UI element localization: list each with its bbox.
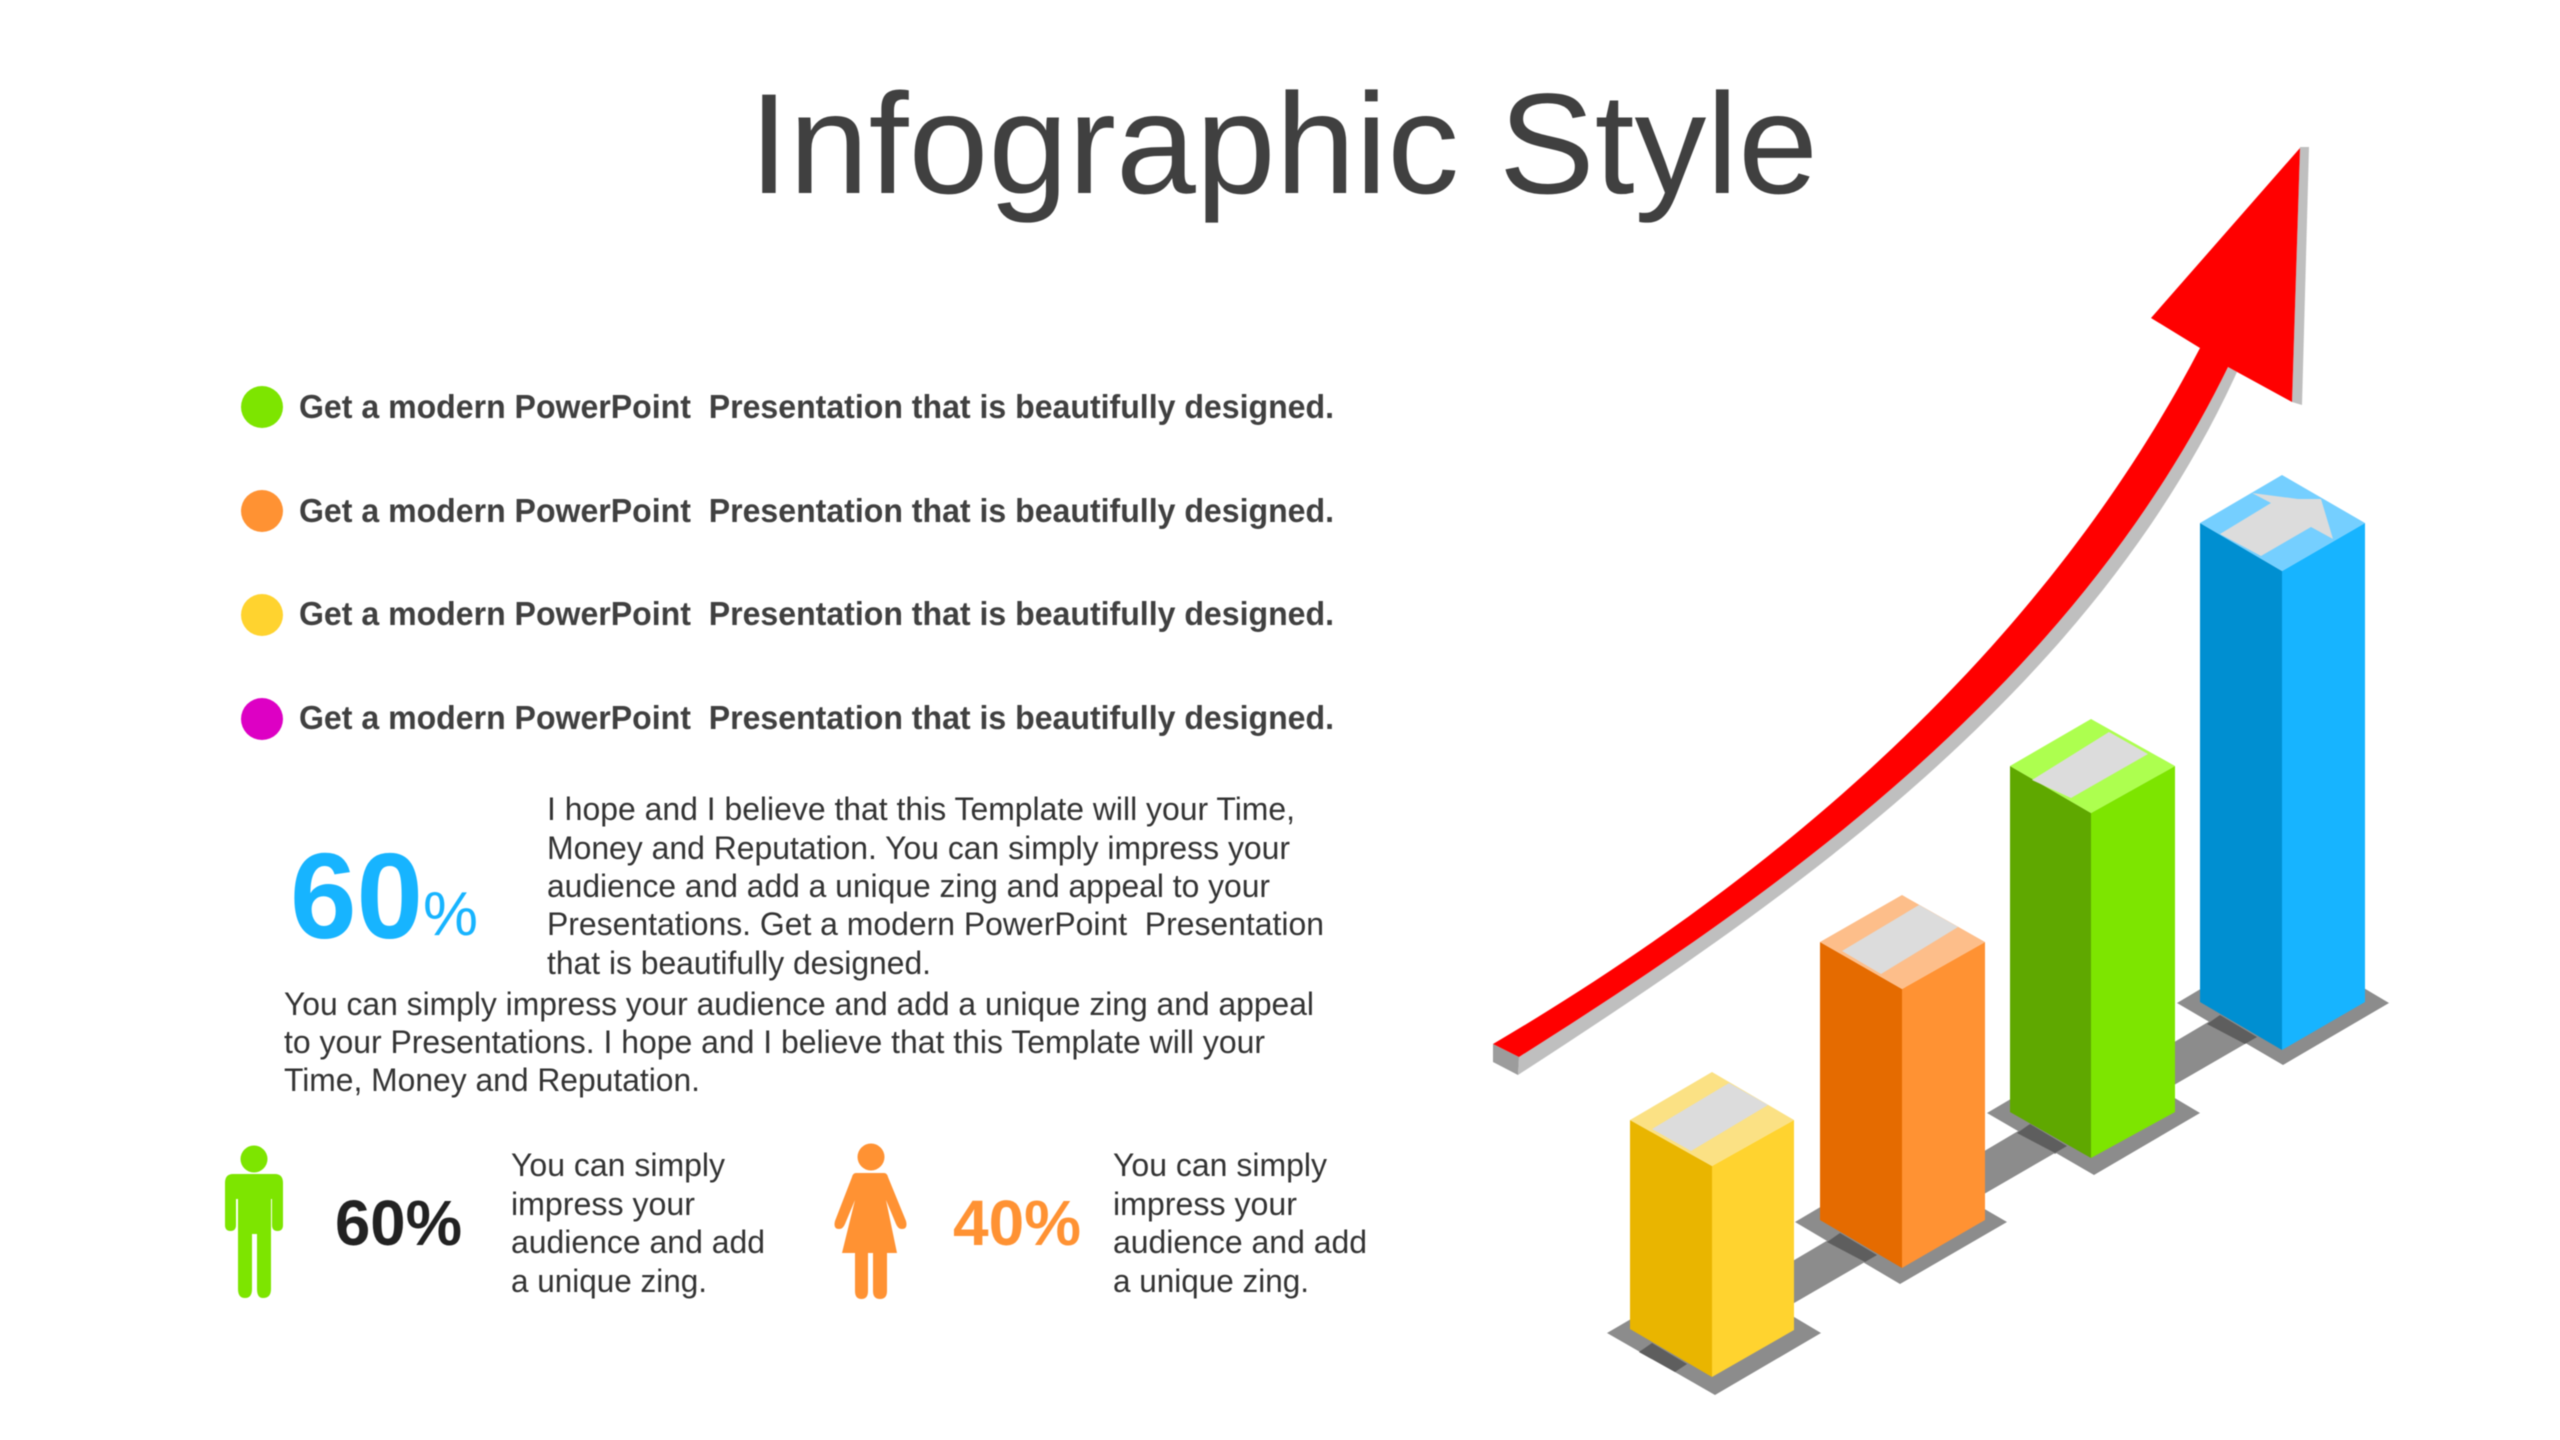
green bar [2010,719,2175,1158]
orange 40 percent label: 40% [953,1187,1081,1259]
paragraph beside stat: that is beautifully designed. [547,945,931,981]
title: Infographic Style [749,65,1818,224]
red growth arrow [1493,147,2309,1075]
bullet 3: Get a modern PowerPoint Presentation that is beautifully designed. [299,595,1334,632]
icon: green man [225,1146,283,1298]
woman caption [1113,1147,1367,1299]
green 60 percent label: 60% [335,1187,462,1259]
paragraph beside stat: audience and add a unique zing and appeal to your [547,868,1270,904]
woman caption: a unique zing. [1113,1263,1309,1299]
paragraph beside stat: Money and Reputation. You can simply impress your [547,830,1290,866]
arrow shadow [1518,367,2237,1075]
full width paragraph: Time, Money and Reputation. [284,1062,700,1098]
woman caption: You can simply [1113,1147,1327,1183]
blue 60 percent stat: % [423,880,478,949]
orange bar [1820,895,1985,1268]
blue 60 percent stat: 60 [290,828,423,964]
isometric bar chart [1607,475,2389,1395]
strip overlap darks [1639,1015,2257,1372]
bullet 2: Get a modern PowerPoint Presentation that is beautifully designed. [299,492,1334,529]
paragraph beside stat [547,791,1324,981]
woman caption: audience and add [1113,1224,1367,1260]
full width paragraph: You can simply impress your audience and add a unique zing and appeal [284,986,1314,1022]
arrow end face [1493,1044,1519,1075]
blue bar [2200,475,2365,1050]
man caption [511,1147,765,1299]
full width paragraph: to your Presentations. I hope and I believe that this Template will your [284,1024,1265,1060]
paragraph beside stat: Presentations. Get a modern PowerPoint Presentation [547,906,1324,942]
yellow bar [1630,1072,1794,1377]
man caption: impress your [511,1186,695,1222]
ground shadows [1607,940,2389,1395]
full width paragraph [284,986,1314,1098]
bullet list [241,386,1334,740]
connecting strips [1639,1015,2257,1372]
bullet 4: Get a modern PowerPoint Presentation that is beautifully designed. [299,699,1334,736]
man caption: a unique zing. [511,1263,707,1299]
arrow head side [2292,147,2309,405]
bullet 1: Get a modern PowerPoint Presentation that is beautifully designed. [299,388,1334,425]
icon: orange woman [834,1144,906,1299]
woman caption: impress your [1113,1186,1297,1222]
paragraph beside stat: I hope and I believe that this Template will your Time, [547,791,1295,827]
man caption: You can simply [511,1147,725,1183]
man caption: audience and add [511,1224,765,1260]
arrow body [1493,148,2300,1057]
